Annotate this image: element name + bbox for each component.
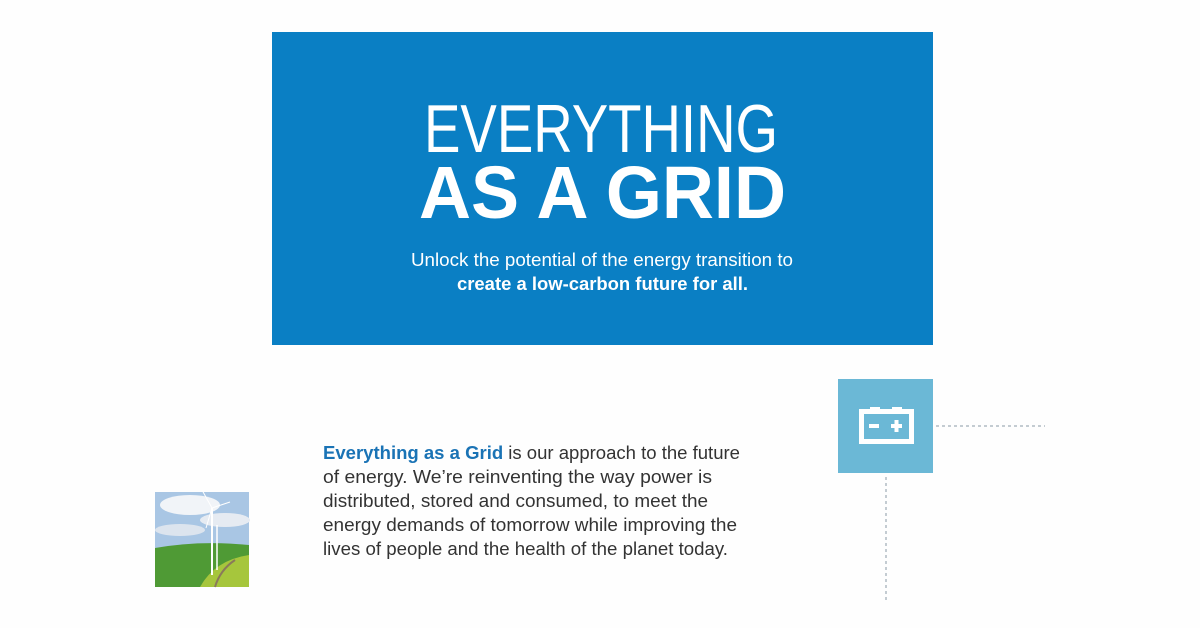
text block: description: lives of people and the health of the planet today. — [323, 539, 728, 559]
heading: everything: EVERYTHING — [424, 91, 778, 167]
subtitle — [411, 250, 793, 294]
heading: as a grid: AS A GRID — [419, 151, 786, 234]
icon: battery — [838, 379, 933, 473]
text block: description: Everything as a Grid is our approach to the future — [323, 443, 740, 463]
connector: dotted lines — [886, 426, 1045, 603]
text block: description: distributed, stored and consumed, to meet the — [323, 491, 708, 511]
text block: description: energy demands of tomorrow while improving the — [323, 515, 737, 535]
photo: wind farm — [155, 490, 250, 587]
text block: description — [323, 443, 740, 559]
panel: title banner — [272, 32, 933, 345]
subtitle: Unlock the potential of the energy transition to — [411, 250, 793, 270]
text block: description: of energy. We’re reinventing the way power is — [323, 467, 712, 487]
subtitle: create a low-carbon future for all. — [457, 274, 748, 294]
